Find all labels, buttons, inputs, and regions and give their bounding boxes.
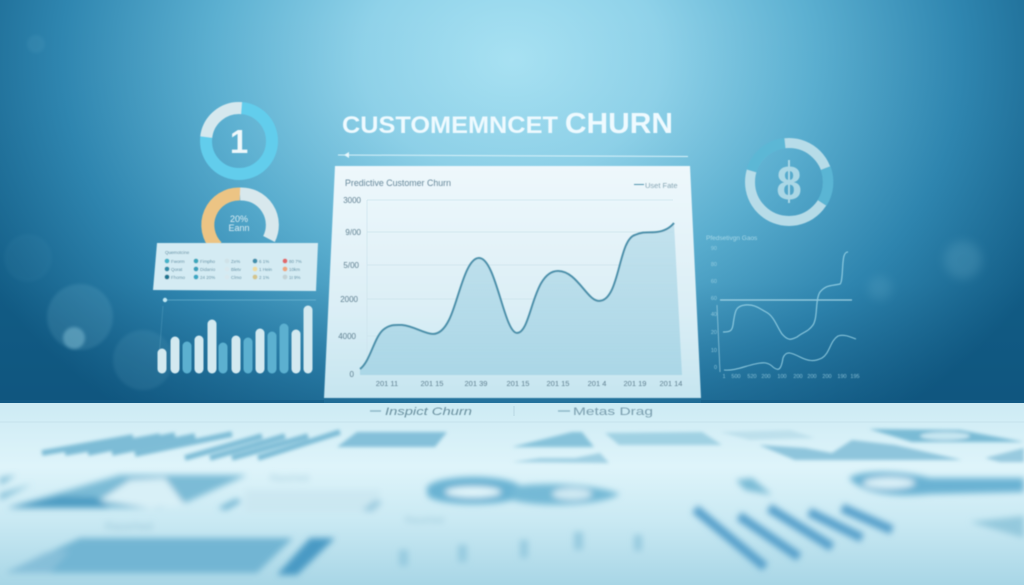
x axis labels: 201 14: [660, 379, 682, 388]
panel: legend table: Quemotcine: [165, 250, 190, 255]
y axis labels: 4000: [338, 332, 357, 341]
panel: legend table: Qorat: [171, 267, 183, 272]
panel: right line chart: 20: [711, 330, 717, 336]
x axis labels: 201 15: [547, 379, 569, 388]
surface labels: [370, 406, 653, 418]
panel: right line chart: Pfedsetivgn Gaos: [706, 235, 758, 242]
panel: main line chart: [324, 166, 701, 398]
panel: legend table: 10km: [289, 267, 300, 272]
panel: right line chart: 190: [837, 374, 847, 380]
panel: right line chart: 60: [711, 296, 717, 302]
panel: right line chart: 40: [711, 312, 717, 318]
panel: right line chart: 100: [777, 374, 787, 380]
bar chart: left: [158, 298, 316, 372]
panel: legend table: Ze%: [231, 259, 240, 264]
grid lines: [367, 200, 673, 375]
panel: legend table: 1 Hein: [259, 267, 273, 272]
panel: legend table: Clmo: [231, 275, 242, 280]
panel: right line chart: 90: [711, 246, 717, 252]
panel: legend table: 1t 9%: [289, 275, 301, 280]
panel: legend table: Fworm: [171, 259, 185, 264]
panel: legend table: 2 1%: [259, 275, 269, 280]
panel: legend table: Fimpho: [200, 259, 216, 264]
blurred surface charts: upper row: [42, 429, 1024, 463]
blurred surface charts: middle row: [0, 472, 1024, 538]
panel: right line chart: 195: [850, 374, 860, 380]
panel: right ring with dollar icon: 8: [776, 157, 802, 209]
bokeh lights: [4, 35, 982, 390]
y axis labels: 3000: [343, 196, 362, 205]
blurred surface charts: lower row: Rausrhed: [105, 521, 153, 533]
panel: right line chart: [706, 235, 860, 380]
panel: left gauge ring: 20%: [230, 214, 248, 224]
blurred surface charts: lower row: Rausrhed: [405, 515, 444, 525]
surface labels: Metas Drag: [573, 406, 653, 418]
panel: right line chart: 200: [761, 374, 771, 380]
x axis labels: 201 4: [588, 379, 606, 388]
panel: right line chart: 200: [822, 374, 832, 380]
table surface: [0, 400, 1024, 585]
panel: right line chart: 60: [711, 279, 717, 285]
x axis labels: 201 19: [624, 379, 646, 388]
blurred surface charts: lower row: [5, 508, 892, 575]
panel: right ring with dollar icon: [750, 143, 828, 221]
x axis labels: 201 15: [507, 379, 529, 388]
panel: left gauge ring: [208, 194, 272, 247]
line series with area: [360, 223, 682, 375]
panel: left ring with number: 1: [230, 123, 248, 160]
panel: right line chart: 520: [747, 374, 757, 380]
y axis labels: [338, 196, 362, 379]
y axis labels: 0: [350, 370, 355, 379]
panel: legend table: [153, 243, 318, 291]
x axis labels: 201 39: [465, 379, 487, 388]
panel: legend table: 6 1%: [259, 259, 269, 264]
panel: legend table: Bletv: [231, 267, 242, 272]
chart legend: Uset Fate: [645, 181, 678, 190]
blurred surface charts: middle row: Rausrhed: [270, 473, 309, 483]
title: CUSTOMEMNCET CHURN: [342, 108, 673, 140]
panel: legend table: Didanio: [200, 267, 216, 272]
panel: right line chart: 10: [711, 348, 717, 354]
panel: legend table: 24 20%: [200, 275, 215, 280]
panel: left ring with number: [206, 108, 272, 174]
background gradient: [0, 0, 1024, 405]
chart heading: Predictive Customer Churn: [345, 178, 451, 189]
panel: right line chart: 80: [711, 262, 717, 268]
surface labels: Inspict Churn: [385, 406, 472, 418]
x axis labels: 201 15: [421, 379, 443, 388]
panel: right line chart: 200: [793, 374, 803, 380]
y axis labels: 2000: [340, 295, 359, 304]
panel: right line chart: 200: [807, 374, 817, 380]
panel: legend table: Fhomo: [171, 275, 186, 280]
panel: left gauge ring: Eann: [228, 223, 250, 233]
panel: right line chart: 1: [722, 374, 726, 380]
y axis labels: 5/00: [343, 261, 360, 270]
y axis labels: 9/00: [345, 228, 362, 237]
panel: right line chart: 500: [731, 374, 741, 380]
panel: right line chart: 0: [714, 365, 717, 371]
panel: legend table: 80 7%: [289, 259, 302, 264]
title rule with arrow: [338, 152, 688, 158]
x axis labels: [376, 379, 682, 388]
x axis labels: 201 11: [376, 379, 398, 388]
